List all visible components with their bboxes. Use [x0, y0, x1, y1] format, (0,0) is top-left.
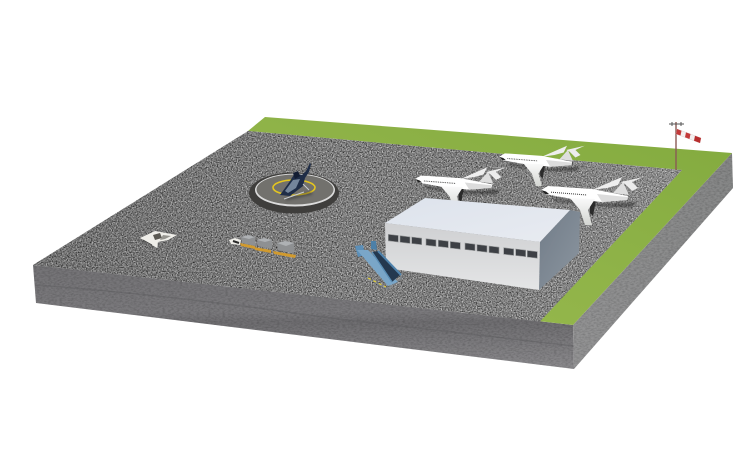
hangar windows: [388, 234, 537, 258]
cart 2: [254, 238, 272, 253]
panel: right soil face: [573, 153, 733, 369]
panel: front soil face: [33, 265, 574, 369]
panel: gravel surface: [33, 131, 682, 322]
hangar roof: [385, 198, 570, 242]
hangar side wall: [539, 210, 580, 290]
plane: front right: [541, 177, 643, 225]
tractor: [229, 238, 241, 245]
plane: left: [415, 167, 506, 210]
baggage train: [229, 235, 296, 258]
tug vehicle: [140, 231, 177, 248]
boarding stairs: [355, 241, 402, 289]
cart 1: [240, 235, 255, 249]
windsock: [669, 122, 701, 170]
icon: helicopter: [280, 163, 312, 199]
cart 3: [273, 241, 296, 258]
hangar front wall: [385, 223, 540, 290]
plane: back: [499, 146, 585, 186]
helipad: [249, 172, 339, 214]
panel: grass strip: [248, 117, 732, 325]
hangar: [385, 198, 580, 290]
